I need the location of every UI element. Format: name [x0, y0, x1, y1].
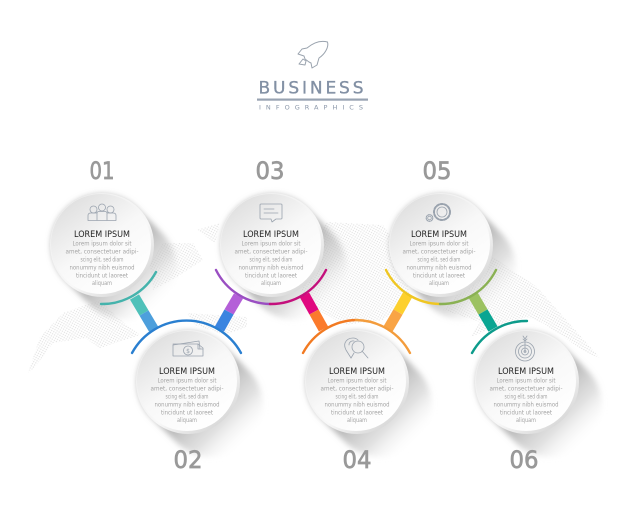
number 05: 05 [422, 157, 452, 185]
label: LOREM IPSUM [329, 367, 385, 377]
body text: amet, consectetuer adipi- [320, 386, 394, 392]
number 06: 06 [510, 446, 538, 474]
body text: tincidunt ut laoreet [331, 410, 383, 416]
body text: scing elit, sed diam [418, 256, 460, 264]
shadow: disc 2 [188, 382, 212, 406]
number 03: 03 [256, 157, 284, 185]
body text: tincidunt ut laoreet [161, 410, 213, 416]
connector 2 to 3 [220, 296, 238, 329]
body text: amet, consectetuer adipi- [402, 248, 476, 256]
body text: aliquam [261, 280, 281, 287]
body text: scing elit, sed diam [336, 394, 378, 400]
disc 1 [50, 193, 154, 297]
body text [402, 240, 476, 287]
shadow: disc 3 [272, 245, 296, 269]
body text: amet, consectetuer adipi- [150, 386, 224, 392]
icon: map pin with magnifier [345, 338, 368, 358]
subtitle: INFOGRAPHICS [259, 104, 363, 112]
body text: nonummy nibh euismod [494, 402, 558, 408]
background world map [28, 222, 600, 373]
label: LOREM IPSUM [159, 367, 215, 377]
disc 5 [389, 193, 493, 297]
body text: aliquam [347, 417, 367, 424]
body text: tincidunt ut laoreet [500, 410, 552, 416]
connector 3 to 4 [304, 295, 324, 329]
body text: Lorem ipsum dolor sit [496, 378, 556, 384]
disc 3 [220, 193, 324, 297]
body text: tincidunt ut laoreet [413, 272, 465, 280]
body text: tincidunt ut laoreet [245, 272, 297, 280]
body text: Lorem ipsum dolor sit [72, 240, 132, 248]
label: LOREM IPSUM [74, 230, 130, 240]
icon: chat bubble [260, 204, 282, 222]
body text: scing elit, sed diam [166, 394, 208, 400]
body text [66, 240, 138, 287]
body text [320, 378, 394, 424]
title: BUSINESS [258, 78, 364, 98]
title rule [257, 98, 368, 101]
body text: nonummy nibh euismod [324, 402, 390, 408]
number 01: 01 [90, 157, 114, 185]
body text: scing elit, sed diam [504, 394, 548, 400]
shadow: disc 6 [527, 382, 551, 406]
connector 4 to 5 [388, 295, 408, 329]
body text: aliquam [177, 417, 197, 424]
icon: gears [426, 204, 450, 221]
shadow: disc 1 [102, 245, 126, 269]
icon: target with arrow [516, 336, 534, 361]
label: LOREM IPSUM [498, 367, 554, 377]
body text: aliquam [516, 417, 536, 424]
label: LOREM IPSUM [243, 230, 299, 240]
body text [150, 378, 224, 424]
icon: people [88, 204, 116, 220]
connector 1 to 2 [134, 297, 154, 329]
body text: nonummy nibh euismod [406, 264, 472, 272]
label: LOREM IPSUM [411, 230, 467, 240]
body text: tincidunt ut laoreet [76, 272, 128, 280]
body text: scing elit, sed diam [250, 256, 292, 264]
body text [490, 378, 562, 424]
icon: banknotes: $ [186, 348, 190, 355]
body text: Lorem ipsum dolor sit [410, 240, 469, 248]
body text: scing elit, sed diam [80, 256, 124, 264]
body text: amet, consectetuer adipi- [234, 248, 308, 256]
body text: aliquam [429, 280, 449, 287]
body text: nonummy nibh euismod [154, 402, 220, 408]
disc 4 [305, 330, 409, 434]
shadow: disc 5 [441, 245, 465, 269]
body text: amet, consectetuer adipi- [66, 248, 138, 256]
number 02: 02 [174, 446, 202, 474]
body text: nonummy nibh euismod [238, 264, 304, 272]
body text [234, 240, 308, 287]
body text: nonummy nibh euismod [70, 264, 134, 272]
disc 2 [136, 330, 240, 434]
arcs [101, 270, 527, 353]
body text: Lorem ipsum dolor sit [328, 378, 387, 384]
body text: amet, consectetuer adipi- [490, 386, 562, 392]
icon: rocket [298, 41, 328, 68]
connector 5 to 6 [473, 295, 493, 329]
number 04: 04 [342, 446, 372, 474]
body text: Lorem ipsum dolor sit [158, 378, 217, 384]
disc 6 [475, 330, 579, 434]
shadow: disc 4 [357, 382, 381, 406]
body text: aliquam [92, 280, 112, 287]
body text: Lorem ipsum dolor sit [242, 240, 301, 248]
